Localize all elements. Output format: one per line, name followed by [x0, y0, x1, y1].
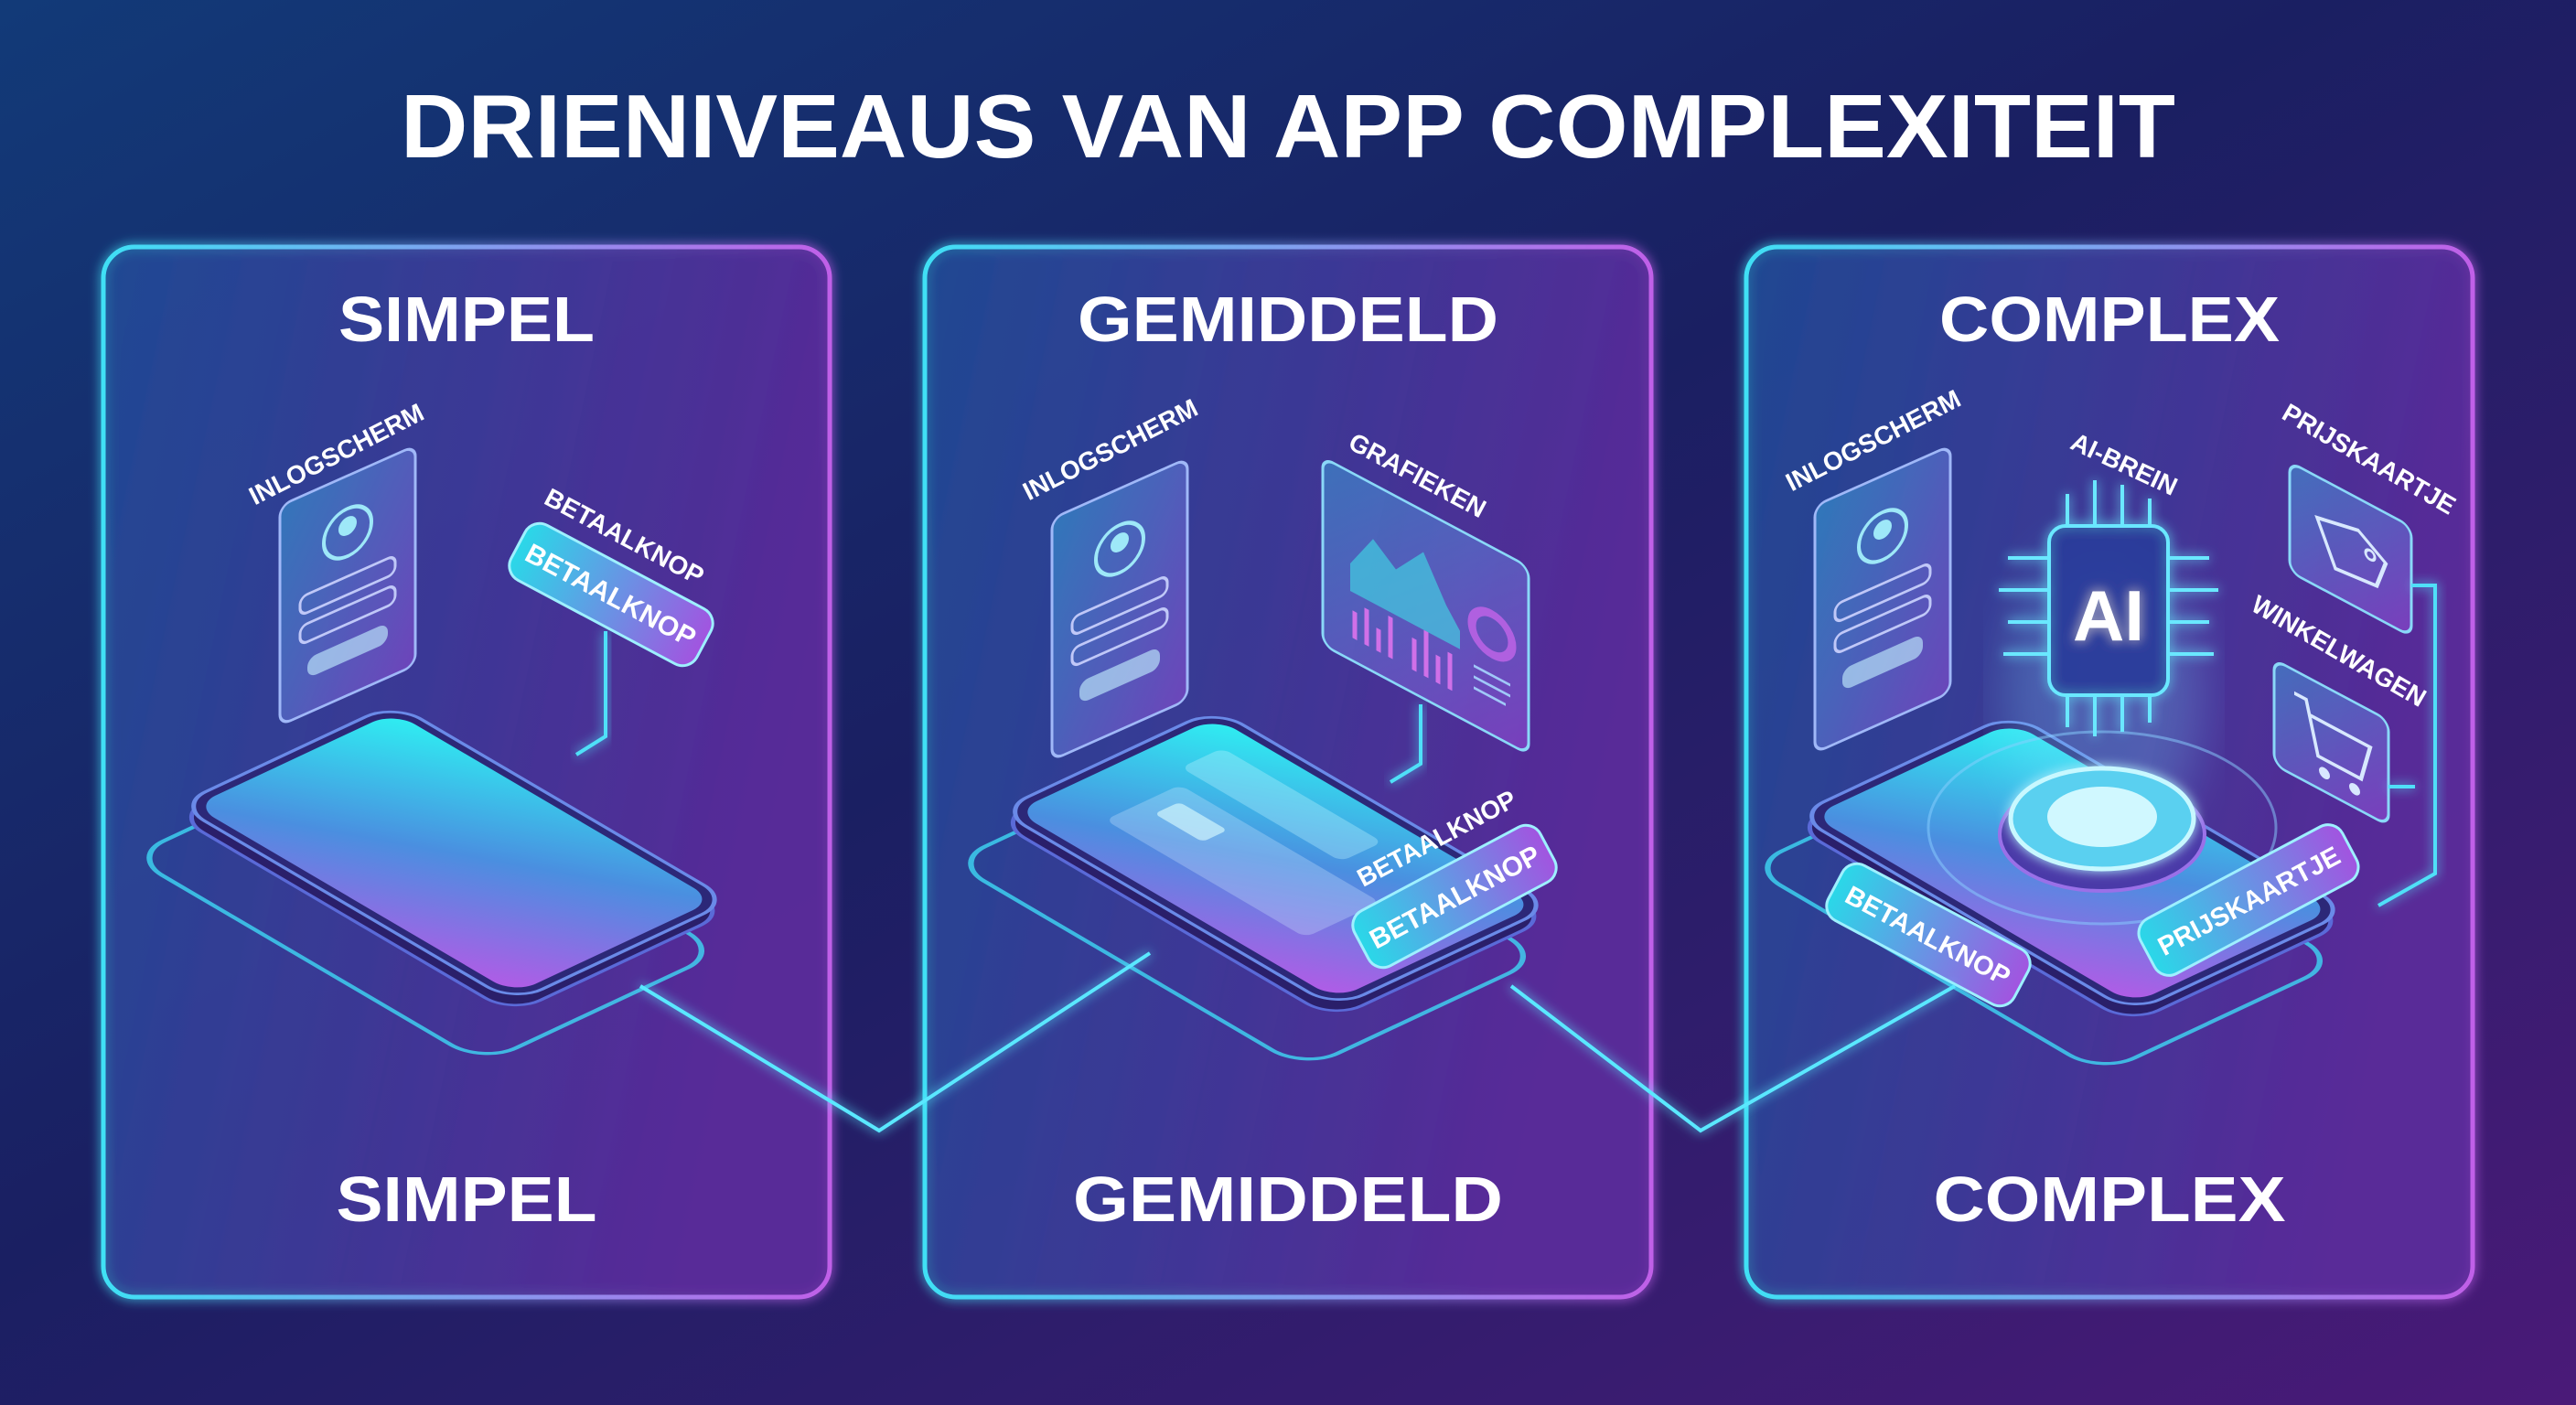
label: inlogscherm: INLOGSCHERM [244, 398, 428, 510]
phone: gemiddeld [924, 709, 1596, 1069]
connector line [1390, 704, 1421, 782]
panel: gemiddeld [924, 247, 1651, 1297]
button: prijskaartje [2133, 819, 2364, 981]
button: betaalknop [1347, 820, 1562, 973]
panel: simpel [102, 247, 830, 1297]
card: inlogscherm [1815, 445, 1950, 753]
button: betaalknop: BETAALKNOP [1365, 840, 1545, 955]
label: grafieken: GRAFIEKEN [1344, 427, 1491, 523]
phone: simpel [102, 703, 775, 1064]
heading: gemiddeld top: GEMIDDELD [1078, 284, 1498, 355]
label: betaalknop: BETAALKNOP [1352, 785, 1521, 892]
title: DRIENIVEAUS VAN APP COMPLEXITEIT [401, 76, 2175, 177]
label: betaalknop: BETAALKNOP [540, 483, 709, 590]
card: grafieken [1323, 457, 1529, 755]
heading: complex bottom: COMPLEX [1934, 1164, 2286, 1235]
button: betaalknop: BETAALKNOP [521, 538, 701, 653]
connector line: betaalknop [576, 631, 606, 755]
button: betaalknop: BETAALKNOP [1841, 881, 2015, 992]
heading: gemiddeld bottom: GEMIDDELD [1073, 1164, 1503, 1235]
label: winkelwagen: WINKELWAGEN [2247, 590, 2431, 713]
disc: ai hub [1928, 732, 2276, 924]
phone: complex [1721, 713, 2393, 1074]
label: inlogscherm: INLOGSCHERM [1018, 393, 1202, 506]
button: betaalknop [1820, 858, 2036, 1012]
label: ai-brein: AI-BREIN [2066, 427, 2182, 501]
glow beam [2003, 540, 2205, 851]
button: prijskaartje: PRIJSKAARTJE [2153, 842, 2345, 962]
card: winkelwagen [2274, 660, 2388, 825]
heading: complex top: COMPLEX [1939, 284, 2280, 355]
card: prijskaartje [2290, 462, 2411, 637]
card: inlogscherm [1052, 458, 1187, 760]
panel: complex [1721, 247, 2473, 1297]
connector lines [2378, 585, 2435, 906]
label: inlogscherm: INLOGSCHERM [1781, 384, 1965, 497]
heading: simpel bottom: SIMPEL [337, 1164, 596, 1235]
icon: ai chip: AI [2073, 575, 2144, 656]
label: prijskaartje: PRIJSKAARTJE [2278, 398, 2461, 520]
card: inlogscherm [280, 445, 415, 725]
button: betaalknop [503, 518, 719, 671]
heading: simpel top: SIMPEL [338, 284, 595, 355]
connection line between levels [640, 953, 1955, 1131]
icon: ai chip [1999, 480, 2218, 736]
